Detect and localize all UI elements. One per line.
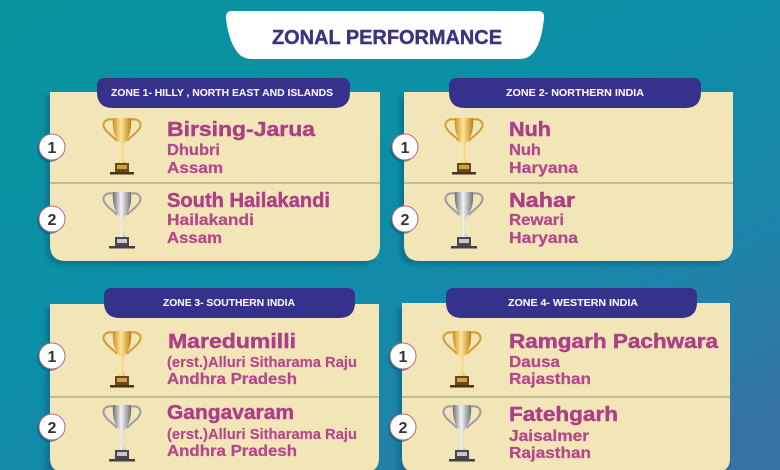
runner-up text <box>509 404 618 462</box>
winner text: Nuh <box>509 142 541 159</box>
winner text <box>167 331 357 388</box>
gold trophy <box>443 331 481 388</box>
rank 2 badge: 2 <box>399 420 408 437</box>
silver trophy <box>103 405 141 462</box>
silver trophy <box>443 405 481 462</box>
winner text: Dhubri <box>167 142 220 159</box>
runner-up text <box>167 402 357 460</box>
runner-up text: Gangavaram <box>167 402 294 424</box>
winner text <box>509 119 578 177</box>
rank 2 badge <box>390 206 418 234</box>
zone 1 tab <box>97 78 350 108</box>
runner-up text: South Hailakandi <box>167 190 330 212</box>
zone 3 tab: ZONE 3- SOUTHERN INDIA <box>163 298 295 309</box>
rank 1 badge: 1 <box>401 140 410 157</box>
winner text: Rajasthan <box>509 371 591 388</box>
rank 1 badge: 1 <box>48 140 57 157</box>
winner text: Dausa <box>509 354 560 371</box>
panel: zone 3 <box>37 288 379 470</box>
runner-up text <box>167 190 330 247</box>
title banner: ZONAL PERFORMANCE <box>272 27 502 49</box>
rank 2 badge <box>37 206 65 234</box>
runner-up text: Nahar <box>509 190 575 212</box>
silver trophy <box>445 192 483 248</box>
rank 2 badge <box>37 414 65 442</box>
rank 1 badge: 1 <box>48 349 57 366</box>
rank 2 badge: 2 <box>48 420 57 437</box>
runner-up text: Hailakandi <box>167 212 254 229</box>
rank 1 badge <box>390 134 418 162</box>
gold trophy <box>103 118 141 174</box>
winner text: Ramgarh Pachwara <box>509 331 719 353</box>
panel: zone 1 <box>37 78 380 265</box>
runner-up text: Rewari <box>509 212 564 229</box>
zone 4 tab: ZONE 4- WESTERN INDIA <box>508 298 638 309</box>
panel: zone 4 <box>388 288 730 470</box>
panel: zone 2 <box>390 78 733 265</box>
zone 2 tab: ZONE 2- NORTHERN INDIA <box>506 88 644 99</box>
winner text: Maredumilli <box>168 331 296 353</box>
runner-up text: (erst.)Alluri Sitharama Raju <box>167 427 357 443</box>
rank 2 badge: 2 <box>401 212 410 229</box>
winner text <box>509 331 719 388</box>
winner text: Andhra Pradesh <box>167 371 297 388</box>
runner-up text: Jaisalmer <box>509 428 589 445</box>
rank 1 badge <box>388 343 416 371</box>
silver trophy <box>103 192 141 248</box>
runner-up text: Assam <box>167 230 222 247</box>
winner text: Assam <box>167 160 223 177</box>
rank 1 badge <box>37 343 65 371</box>
runner-up text <box>509 190 578 247</box>
gold trophy <box>445 118 483 174</box>
winner text: Birsing-Jarua <box>167 119 316 141</box>
rank 2 badge: 2 <box>48 212 57 229</box>
zone 1 tab: ZONE 1- HILLY , NORTH EAST AND ISLANDS <box>111 88 333 99</box>
zone 4 tab <box>446 288 697 318</box>
winner text: Nuh <box>509 119 551 141</box>
zone 3 tab <box>104 288 355 318</box>
runner-up text: Rajasthan <box>509 445 591 462</box>
runner-up text: Fatehgarh <box>509 404 618 426</box>
rank 2 badge <box>388 414 416 442</box>
runner-up text: Andhra Pradesh <box>167 443 297 460</box>
winner text <box>167 119 316 177</box>
winner text: Haryana <box>509 160 578 177</box>
rank 1 badge <box>37 134 65 162</box>
runner-up text: Haryana <box>509 230 578 247</box>
gold trophy <box>103 331 141 388</box>
title banner <box>226 11 544 59</box>
winner text: (erst.)Alluri Sitharama Raju <box>167 355 357 371</box>
zone 2 tab <box>449 78 701 108</box>
rank 1 badge: 1 <box>399 349 408 366</box>
